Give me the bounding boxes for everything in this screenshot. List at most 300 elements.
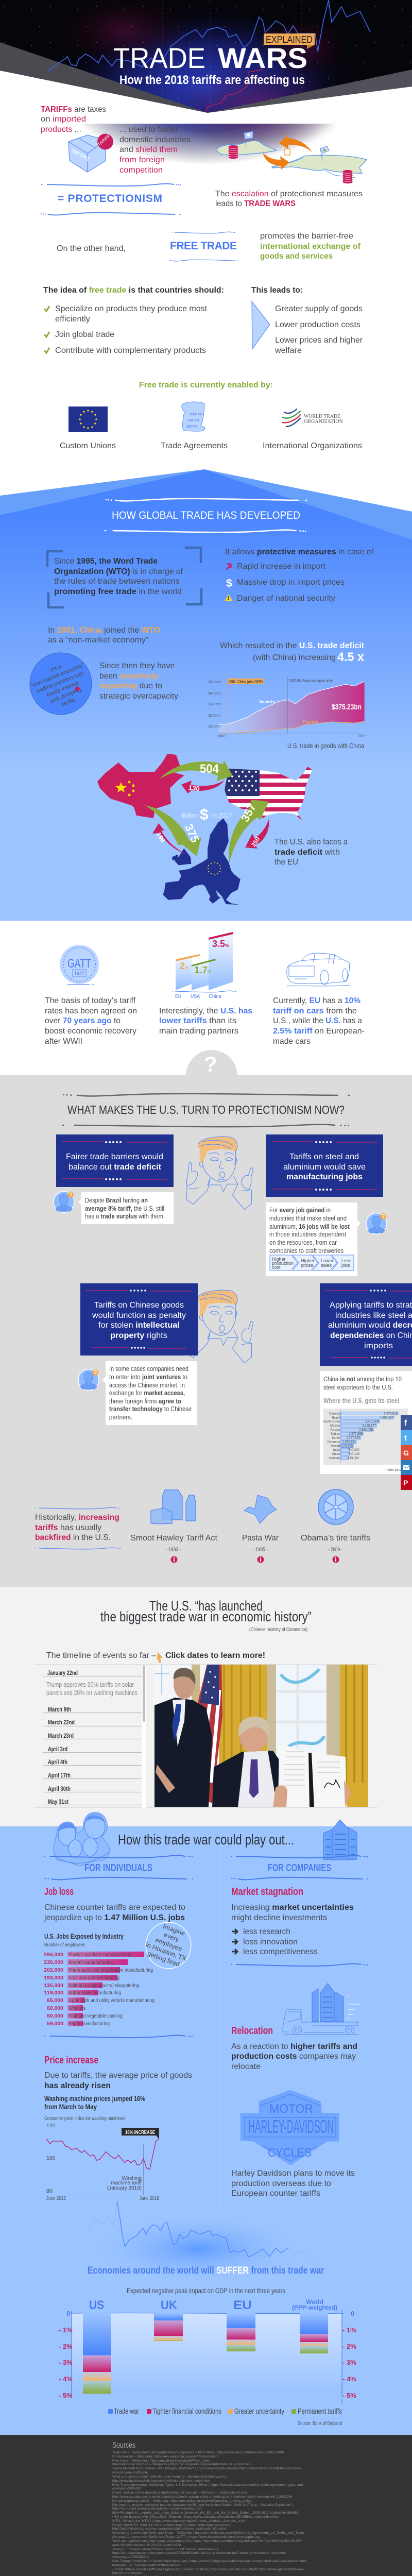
timeline: dates list: May 31st	[48, 1798, 68, 1805]
note: where the US gets its steel: 1,128,100	[339, 1445, 353, 1448]
callout: WTO in brackets: Since 1995, the Word Trade	[54, 557, 158, 566]
chart: US jobs exposed by industry	[44, 1933, 154, 2027]
text: Harley Davidson relocation	[231, 2169, 355, 2198]
text: market stagnation: Increasing market uncertainties	[231, 1903, 354, 1912]
note: jobs lost: Higher	[301, 1258, 315, 1263]
note: jobs lost: production	[272, 1261, 294, 1266]
chart: US trade in goods with China: $300bn	[209, 703, 220, 706]
label: billion dollars in 2017: $	[200, 806, 209, 823]
note: joint ventures: these foreign firms agree to	[109, 1398, 181, 1405]
heading: free trade	[169, 232, 238, 261]
panel: idea of free trade checklist: Contribute with complementary products	[55, 346, 206, 355]
text: sources list: highest-and-lowest/	[112, 2571, 142, 2575]
heading: biggest trade war quote	[100, 1598, 312, 1633]
chart: washing machine price index: June 2015	[46, 2195, 66, 2201]
text: foster domestic industries: competition	[119, 166, 163, 175]
chart: tariff rates bars: %	[208, 970, 211, 974]
text: GATT basis: over 70 years ago to	[45, 1016, 121, 1025]
illustration: family	[53, 1812, 110, 1866]
chart: GDP impact stacked bars: - 1%	[342, 2326, 356, 2334]
chart: tariff rates bars: %	[185, 965, 188, 970]
text: sources list: bedeuten_de_5aa2a41ee4b01b9b0a3abcec	[112, 2564, 180, 2567]
chart: US jobs exposed by industry: Aircraft manufacturing	[68, 1959, 113, 1965]
title: WARS	[218, 42, 307, 74]
chart: washing machine price index: (January 2018)	[107, 2185, 142, 2191]
text: car tariffs: U.S., while the U.S. has a	[273, 1016, 362, 1025]
text: US trade deficit with EU: trade deficit with	[274, 848, 340, 857]
heading: how global trade has developed: HOW GLOBAL TRADE HAS DEVELOPED	[112, 510, 300, 521]
note: where the US gets its steel: China is not among the top 10	[323, 1376, 402, 1383]
heading: free trade: FREE TRADE	[170, 240, 237, 252]
text: relocation: production costs companies may	[231, 2052, 356, 2061]
text: sources list: International economics – Wikipedia | https://en.wikipedia.org/wiki/International_economics	[112, 2463, 250, 2466]
chart: US jobs exposed by industry: 60,000	[47, 2005, 63, 2011]
note: Brazil trade surplus: Despite Brazil having an	[85, 1197, 148, 1204]
buttons: social share: t	[404, 1434, 407, 1443]
chart: GDP impact stacked bars	[59, 2287, 356, 2403]
chart: US jobs exposed by industry: Paper manufacturing	[68, 2021, 110, 2027]
legend: GDP impact: Trade war	[114, 2407, 139, 2416]
section: protectionism background	[0, 1050, 412, 1587]
chart: US jobs exposed by industry: 65,000	[47, 1997, 63, 2004]
label: billion dollars in 2017	[182, 806, 232, 823]
illustration: Trump lower	[186, 1290, 253, 1363]
timeline: dates list: March 9th	[48, 1706, 71, 1713]
text: price increase: Due to tariffs, the average price of goods	[44, 2071, 192, 2080]
chart: US jobs exposed by industry: Fruit and nut tree farming	[68, 1975, 119, 1981]
text: free trade promotes: promotes the barrier-free	[260, 232, 353, 241]
text: massively exporting: Since then they have	[99, 662, 175, 670]
panel: manufacturing jobs argument: manufacturing jobs	[286, 1173, 363, 1181]
chart: US jobs exposed by industry: 294,000	[44, 1952, 63, 1958]
chart: US trade in goods with China: U.S. trade in goods with China	[287, 742, 365, 750]
chart: tariff rates bars: 2	[180, 961, 185, 971]
heading: protectionism	[42, 183, 180, 215]
label: billion dollars in 2017: Billion	[182, 811, 199, 819]
chart: GDP impact stacked bars: US	[89, 2298, 104, 2312]
text: price increase	[44, 2055, 192, 2122]
text: sources list: http://www.businessdictionary.com/definition/customs-union.html	[112, 2479, 210, 2483]
chart: US jobs exposed by industry: 230,000	[44, 1959, 63, 1965]
callout: Houston circle: employee	[154, 1936, 183, 1953]
timeline: dates list	[43, 1665, 146, 1808]
title	[113, 42, 307, 74]
text: market stagnation: less competitiveness	[243, 1947, 318, 1956]
note: where the US gets its steel: Russia	[331, 1429, 340, 1432]
section: play out background	[0, 1826, 412, 2435]
text: US trade deficit increase	[220, 641, 365, 664]
note: where the US gets its steel: 3,401,404	[365, 1420, 380, 1423]
arrow: China to EU 375	[145, 805, 202, 856]
note: where the US gets its steel: Japan	[332, 1436, 340, 1439]
icon: farfalle pasta	[244, 1495, 277, 1523]
label: Pasta War	[242, 1534, 279, 1563]
text: sources list: volkswagen/725236002/	[112, 2555, 149, 2559]
note: where the US gets its steel: steel exporteurs to the U.S.	[323, 1384, 393, 1391]
text: job loss	[44, 1886, 185, 1922]
text: sources list: What is customs union? definition and meaning – BusinessDictionary.com |	[112, 2475, 227, 2479]
section: sources background	[0, 2435, 412, 2576]
chart: US jobs exposed by industry: Light truck and utility vehicle manufacturing	[68, 1997, 154, 2004]
chart: GDP impact stacked bars: EU	[233, 2298, 252, 2312]
map: European Union	[163, 818, 241, 905]
note: where the US gets its steel	[320, 1371, 412, 1474]
header banner	[0, 0, 412, 165]
panel: trade deficit argument: Fairer trade barriers would	[66, 1153, 163, 1161]
note: where the US gets its steel: Germany	[327, 1440, 340, 1444]
timeline: dates list: April 17th	[48, 1772, 71, 1779]
icon: GATT seal	[60, 945, 99, 985]
chart: washing machine price index: June 2018	[140, 2195, 159, 2201]
note: where the US gets its steel: 679,092	[348, 1457, 359, 1460]
note: where the US gets its steel: Taiwan	[330, 1445, 340, 1448]
legend: GDP impact: Permanent tariffs	[298, 2407, 342, 2416]
callout: anti-dumping circle: tariffs	[61, 697, 76, 708]
text: US lower tariffs	[159, 1007, 252, 1036]
icon: trade agreement scroll: JEFTA	[186, 424, 197, 429]
note: where the US gets its steel: 740,126	[348, 1453, 360, 1456]
photo: Trump signing tariff order	[154, 1665, 368, 1807]
text: job loss: Chinese counter tariffs are expected to	[44, 1903, 185, 1912]
chart: GDP impact stacked bars: - 1%	[59, 2326, 73, 2334]
chart: US trade in goods with China: $375.23bn	[332, 703, 362, 711]
buttons: social share: f	[404, 1419, 407, 1428]
text: tariffs definition: products ...	[41, 125, 81, 134]
panel: intellectual property argument	[80, 1283, 198, 1355]
text: timeline prompt: Click dates to learn more!	[165, 1651, 265, 1660]
note: where the US gets its steel: India	[333, 1449, 340, 1452]
heading: protectionism: = PROTECTIONISM	[58, 193, 162, 205]
text: massively exporting: strategic overcapacity	[99, 692, 178, 701]
timeline: dates list: April 4th	[48, 1758, 67, 1766]
text: sources list: http://www.sueddeutsche.de/wirtschaft/strafzoelle-warum-china-unbedingt-eine-marktwirtschaft-werden-will-1.3031284	[112, 2495, 293, 2499]
text: foster domestic industries: and shield them	[119, 145, 178, 154]
chart: washing machine price index: machine tariff	[111, 2180, 142, 2186]
arrow: US to EU 250	[245, 819, 269, 849]
chart: GDP impact stacked bars: - 5%	[59, 2392, 73, 2399]
icon: trade agreement scroll	[182, 402, 205, 431]
icon: milk and butter goods	[151, 1490, 196, 1524]
text: free trade promotes: goods and services	[260, 252, 333, 261]
note: where the US gets its steel: 3,155,177	[362, 1425, 376, 1428]
chart: US trade in goods with China: $400bn	[209, 692, 220, 696]
chart: US jobs exposed by industry: Number of employees	[44, 1942, 85, 1948]
timeline: dates list: April 30th	[48, 1785, 71, 1792]
text: sources list: China: Warum China unbedingt Marktwirtschaft sein will – Wirtschaft – Süddeutsche.de |	[112, 2491, 247, 2495]
panel: Chinese dependencies argument	[320, 1283, 412, 1366]
heading: sources: Sources	[112, 2441, 135, 2450]
text: sources list: http://faktenfinder.tagesschau.de/ausland/faktencheck-strafzoelle-101.html	[112, 2527, 226, 2531]
text: China joined WTO	[48, 626, 160, 645]
text: increasing tariffs backfired	[35, 1507, 121, 1549]
text: sources list: Volkswirtschaft für Dummies: Was bringen Strafzölle? | https://www.capital.de/wirtschaft-politik/volkswirtschaft-fuer-dummies-	[112, 2467, 302, 2470]
arrow: US to China 130	[181, 780, 225, 793]
chart: US jobs exposed by industry: 135,000	[44, 1982, 63, 1989]
text: US trade deficit with EU	[274, 838, 348, 867]
note: joint ventures	[102, 1361, 197, 1425]
chart: US jobs exposed by industry: Wineries	[68, 2005, 85, 2011]
text: relocation: As a reaction to higher tariffs and	[231, 2042, 357, 2051]
text: increasing tariffs backfired: backfired in the U.S.	[35, 1533, 111, 1542]
text: sources list: Dumping (pricing policy) – Wikipedia | https://en.wikipedia.org/wiki/Dumping_(pricing_policy)	[112, 2499, 252, 2503]
chart: US trade in goods with China: 2007-08: Asian economic crisis	[289, 679, 333, 683]
text: US trade deficit increase: (with China) increasing	[253, 653, 336, 662]
logo: Harley-Davidson: MOTOR	[269, 2102, 313, 2116]
text: increasing tariffs backfired: Historically, increasing	[35, 1513, 119, 1522]
heading: economies will suffer: Economies around the world will SUFFER from this trade war	[88, 2265, 324, 2276]
map: China	[97, 754, 184, 818]
panel: idea of free trade checklist: Join global trade	[55, 330, 114, 339]
note: where the US gets its steel: 2,860,085	[359, 1429, 373, 1432]
illustration: two islands trading	[217, 131, 367, 183]
text: sources list: examples-3305897	[112, 2487, 142, 2490]
note: where the US gets its steel: 1,727,843	[346, 1436, 360, 1439]
text: US trade deficit with EU: the EU	[274, 858, 298, 867]
label: billion dollars in 2017: in 2017	[212, 811, 232, 819]
callout: anti-dumping circle: “non-market economy”	[30, 662, 85, 689]
text: job loss: jeopardize up to 1.47 Million U.S. jobs	[44, 1913, 185, 1922]
chart: tariff rates bars: EU	[175, 993, 181, 999]
callout: anti-dumping circle: As a	[49, 663, 63, 673]
panel: Chinese dependencies argument: imports	[364, 1342, 393, 1350]
text: car tariffs: 2.5% tariff on European-	[273, 1027, 365, 1036]
text: sources list: end=2016&locations=US-CN-EU&start=1988	[112, 2544, 181, 2547]
callout: WTO in brackets	[47, 548, 201, 607]
note: jobs lost: Less	[341, 1258, 352, 1263]
text: free trade promotes: international exchange of	[260, 242, 361, 251]
text: US trade deficit with EU: The U.S. also faces a	[274, 838, 348, 846]
text: GATT basis: after WWII	[45, 1037, 82, 1046]
text: car tariffs	[273, 996, 365, 1046]
illustration: office buildings	[323, 1820, 357, 1860]
list: protective measures: Rapid increase in import	[237, 562, 326, 571]
heading: for individuals	[44, 1856, 193, 1879]
text: price increase: Consumer price index for washing machines	[44, 2116, 125, 2122]
chart: GDP impact stacked bars: - 5%	[342, 2392, 356, 2399]
note: joint ventures: In some cases companies need	[109, 1365, 188, 1372]
text: escalation leads to trade wars: The escalation of protectionist measures	[215, 190, 363, 198]
note: jobs lost: in those industries dependent	[269, 1231, 346, 1238]
text: sources list: General Agreement on Tariffs and Trade – Wikipedia | https://en.wikipedia.org/wiki/General_Agreement_on_Tariffs_and_Trade	[112, 2531, 304, 2535]
text: foster domestic industries: ... used to foster	[119, 125, 179, 134]
chart: US trade in goods with China: $500bn	[209, 681, 220, 684]
callout: Houston circle: every	[163, 1931, 180, 1943]
text: massively exporting: been massively	[99, 672, 158, 681]
panel: manufacturing jobs argument: Tariffs on steel and	[289, 1153, 359, 1161]
note: where the US gets its steel: Vietnam	[329, 1457, 340, 1460]
panel: manufacturing jobs argument	[266, 1134, 383, 1197]
text: foster domestic industries: from foreign	[119, 156, 165, 164]
panel: intellectual property argument: for stolen intellectual	[98, 1321, 180, 1330]
chart: US trade in goods with China: Exports	[303, 720, 318, 724]
heading: how this trade war could play out: How this trade war could play out...	[118, 1832, 294, 1848]
text: market stagnation: might decline investments	[231, 1913, 327, 1922]
panel: trade deficit argument: balance out trade deficit	[68, 1163, 162, 1172]
buttons: social share: P	[403, 1479, 408, 1487]
text: sources list: File:Imports, exports and trade balance between the EU and the United States, 2008-2017.png – Statistics Explained" |	[112, 2503, 294, 2507]
note: Brazil trade surplus	[78, 1192, 174, 1224]
callout: Houston circle: in Houston, TX	[145, 1941, 187, 1962]
chart: GDP impact stacked bars: - 3%	[342, 2359, 356, 2366]
text: sources list: Trade wars, Trump tariffs and protectionism explained – BBC News | https://www.bbc.com/news/world-43512098	[112, 2451, 284, 2454]
callout: anti-dumping circle: easily impose	[46, 680, 80, 698]
note: where the US gets its steel: Where the U.S. gets its steel	[323, 1397, 399, 1404]
labels: enablers: International Organizations	[263, 442, 362, 450]
panel: manufacturing jobs argument: aluminium would save	[283, 1163, 366, 1172]
label: Obama tire tariffs: Obama’s tire tariffs	[301, 1534, 370, 1543]
note: jobs lost: on the resources, from car	[269, 1239, 337, 1246]
chart: washing machine price index: 120	[46, 2123, 56, 2129]
list: protective measures	[225, 548, 374, 603]
note: where the US gets its steel: Turkey	[331, 1433, 340, 1436]
heading: what makes the US turn to protectionism	[63, 1094, 349, 1127]
chart: US jobs exposed by industry: 60,000	[47, 2013, 63, 2019]
buttons: social share	[401, 1415, 412, 1490]
logo: Harley-Davidson	[241, 2090, 339, 2165]
arrow: US to China 130: 130	[188, 784, 200, 793]
note: jobs lost: prices	[301, 1263, 314, 1268]
chart: GDP impact stacked bars: 0	[66, 2310, 70, 2317]
callout: Houston circle: Imagine	[162, 1923, 186, 1937]
icon: GATT seal: GATT	[67, 957, 91, 971]
panel: this leads to: Lower production costs	[275, 320, 360, 329]
icon: tire	[318, 1489, 353, 1524]
text: Harley Davidson relocation: Harley Davidson plans to move its	[231, 2169, 355, 2178]
illustration: truck carrying buildings	[283, 1984, 359, 2035]
chart: tariff rates bars: 1.7	[194, 965, 208, 975]
chart: washing machine price index	[46, 2123, 159, 2201]
chart: tariff rates bars: China	[209, 993, 221, 999]
text: sources list: General Agreement On Tariffs And Trade (GATT) | https://www.investopedia.com/terms/g/gatt.asp	[112, 2535, 261, 2539]
text: sources list: Trump's European car tariff threat could crunch German automakers |	[112, 2547, 218, 2551]
arrow: China to EU 375: 375	[182, 822, 202, 844]
text: tariffs definition: TARIFFs are taxes	[41, 105, 106, 114]
text: car tariffs: made cars	[273, 1037, 311, 1046]
icon: trade agreement scroll: SAFTA	[187, 418, 199, 422]
logo: world trade organization: ORGANIZATION	[304, 418, 343, 425]
arrow: EU to China 198: 198	[155, 831, 166, 844]
icon: car	[287, 953, 350, 986]
text: sources list: Was Trumps Strafzölle für Deutschland bedeuten | https://www.huffingtonpost.de/entry/was-trumps-strafzoelle-fuer-deutschland-	[112, 2560, 307, 2563]
label: Obama tire tariffs	[301, 1534, 370, 1563]
label: Pasta War: - 1985 -	[253, 1547, 268, 1553]
label: Smoot Hawley: - 1930 -	[166, 1547, 181, 1553]
heading: idea of free trade: The idea of free trade is that countries should:	[43, 286, 224, 295]
callout: anti-dumping circle: trading partners can	[36, 670, 84, 694]
chart: US jobs exposed by industry: U.S. Jobs Exposed by Industry	[44, 1933, 124, 1940]
text: market stagnation: Market stagnation	[231, 1886, 303, 1897]
chart: GDP impact stacked bars: (PPP-weighted)	[292, 2304, 337, 2311]
timeline: dates list: April 3rd	[48, 1745, 67, 1753]
text: China joined WTO: as a “non-market economy”	[48, 636, 148, 645]
text: on the other hand: On the other hand,	[57, 244, 126, 253]
chart: tariff rates bars: %	[225, 943, 229, 948]
callout: WTO in brackets: Organization (WTO) is in charge of	[54, 567, 183, 576]
text: GATT basis: rates has been agreed on	[45, 1007, 137, 1015]
panel: trade deficit argument	[56, 1134, 174, 1187]
callout: anti-dumping circle: anti-dumping	[49, 687, 82, 705]
panel: idea of free trade checklist	[43, 286, 224, 355]
list: protective measures: $	[226, 578, 232, 589]
avatar: expert 2	[366, 1213, 387, 1234]
text: US lower tariffs: main trading partners	[159, 1027, 238, 1036]
text: tariffs definition	[41, 105, 106, 134]
chart: washing machine price index: 100	[46, 2155, 56, 2161]
chart: GDP impact stacked bars: - 4%	[342, 2375, 356, 2383]
tag: explained	[264, 33, 315, 49]
timeline: dates list: panels and 20% on washing machines	[46, 1689, 138, 1697]
panel: this leads to: Lower prices and higher	[275, 336, 363, 345]
note: jobs lost: sales	[321, 1263, 332, 1268]
note: where the US gets its steel: Brazil	[332, 1417, 340, 1420]
text: US trade deficit increase: Which resulted in the U.S. trade deficit	[220, 641, 365, 650]
avatar: expert 3	[78, 1369, 99, 1390]
subtitle: How the 2018 tariffs are affecting us	[119, 73, 305, 87]
arrow: EU to US 357: 357	[238, 801, 259, 824]
text: GATT basis	[45, 996, 137, 1046]
chart: GDP impact stacked bars: - 2%	[342, 2343, 356, 2350]
chart: washing machine price index: 16% INCREASE	[125, 2130, 155, 2136]
text: relocation: Relocation	[231, 2025, 273, 2037]
text: sources list: http://ec.europa.eu/eurostat/statistics-explained/index.php?	[112, 2507, 202, 2511]
decorative chart line	[88, 2201, 315, 2285]
text: sources list: • Chart: Where Global Tariffs Are Highest And Lowest | Statista | https://www.statista.com/chart/13335/where-global-tariffs-are-	[112, 2568, 304, 2571]
text: sources list: Protectionism – Wikipedia | https://en.wikipedia.org/wiki/Protectionism	[112, 2455, 218, 2459]
chart: US trade in goods with China: $200bn	[209, 714, 220, 718]
icon: import box with tariff sticker	[68, 133, 113, 172]
text: sources list	[112, 2451, 307, 2576]
text: China joined WTO: In 2001, China joined the WTO	[48, 626, 160, 635]
chart: tariff rates bars: 3.5	[212, 939, 225, 949]
text: massively exporting: exporting due to	[99, 682, 162, 690]
text: foster domestic industries	[119, 125, 191, 175]
text: Harley Davidson relocation: European counter tariffs	[231, 2189, 320, 2198]
heading: free trade enabled by: Free trade is currently enabled by:	[139, 381, 273, 389]
chart: US jobs exposed by industry: Fruit and vegetable canning	[68, 2013, 123, 2019]
note: joint ventures: access the Chinese market. In	[109, 1382, 185, 1389]
note: jobs lost: Lower	[321, 1258, 334, 1263]
avatar: expert 1	[54, 1191, 74, 1213]
section: global trade background	[0, 469, 412, 921]
timeline: dates list: January 22nd	[47, 1669, 78, 1676]
heading: biggest trade war quote: The U.S. “has launched	[149, 1598, 263, 1614]
chart: US jobs exposed by industry: Automobile manufacturing	[68, 1990, 121, 1996]
note: joint ventures: to enter into joint ventures to	[109, 1374, 187, 1381]
heading: for companies: FOR COMPANIES	[268, 1862, 331, 1874]
arrow: US to EU 250: 250	[250, 835, 262, 848]
note: where the US gets its steel: 1,977,865	[349, 1433, 363, 1436]
legend: GDP impact: Source: Bank of England	[298, 2420, 342, 2427]
note: Brazil trade surplus: average 8% tariff, the U.S. still	[85, 1205, 164, 1212]
logo: world trade organization: WORLD TRADE	[304, 413, 340, 419]
text: timeline prompt: The timeline of events so far –	[46, 1651, 156, 1660]
legend: GDP impact: Tighter financial conditions	[152, 2407, 221, 2416]
heading: for individuals: FOR INDIVIDUALS	[84, 1862, 152, 1874]
chart: tariff rates bars	[173, 932, 236, 999]
note: where the US gets its steel: China	[332, 1453, 340, 1456]
section: timeline background	[0, 1587, 412, 1826]
divider: left column	[44, 2035, 192, 2038]
arrow: EU to China 198	[152, 823, 186, 854]
list: protective measures: Danger of national security	[237, 594, 335, 603]
legend: GDP impact	[108, 2407, 342, 2427]
icon: EU flag	[68, 406, 108, 432]
chart: US trade in goods with China: $100bn	[209, 725, 220, 728]
text: sources list: WTO | What is the WTO? | https://www.wto.org/english/thewto_e/whatis_e/whatis_e.htm	[112, 2519, 246, 2523]
text: Harley Davidson relocation: production overseas due to	[231, 2179, 331, 2188]
text: car tariffs: tariff on cars from the	[273, 1007, 357, 1015]
chart: US trade in goods with China: 2017	[358, 735, 366, 738]
